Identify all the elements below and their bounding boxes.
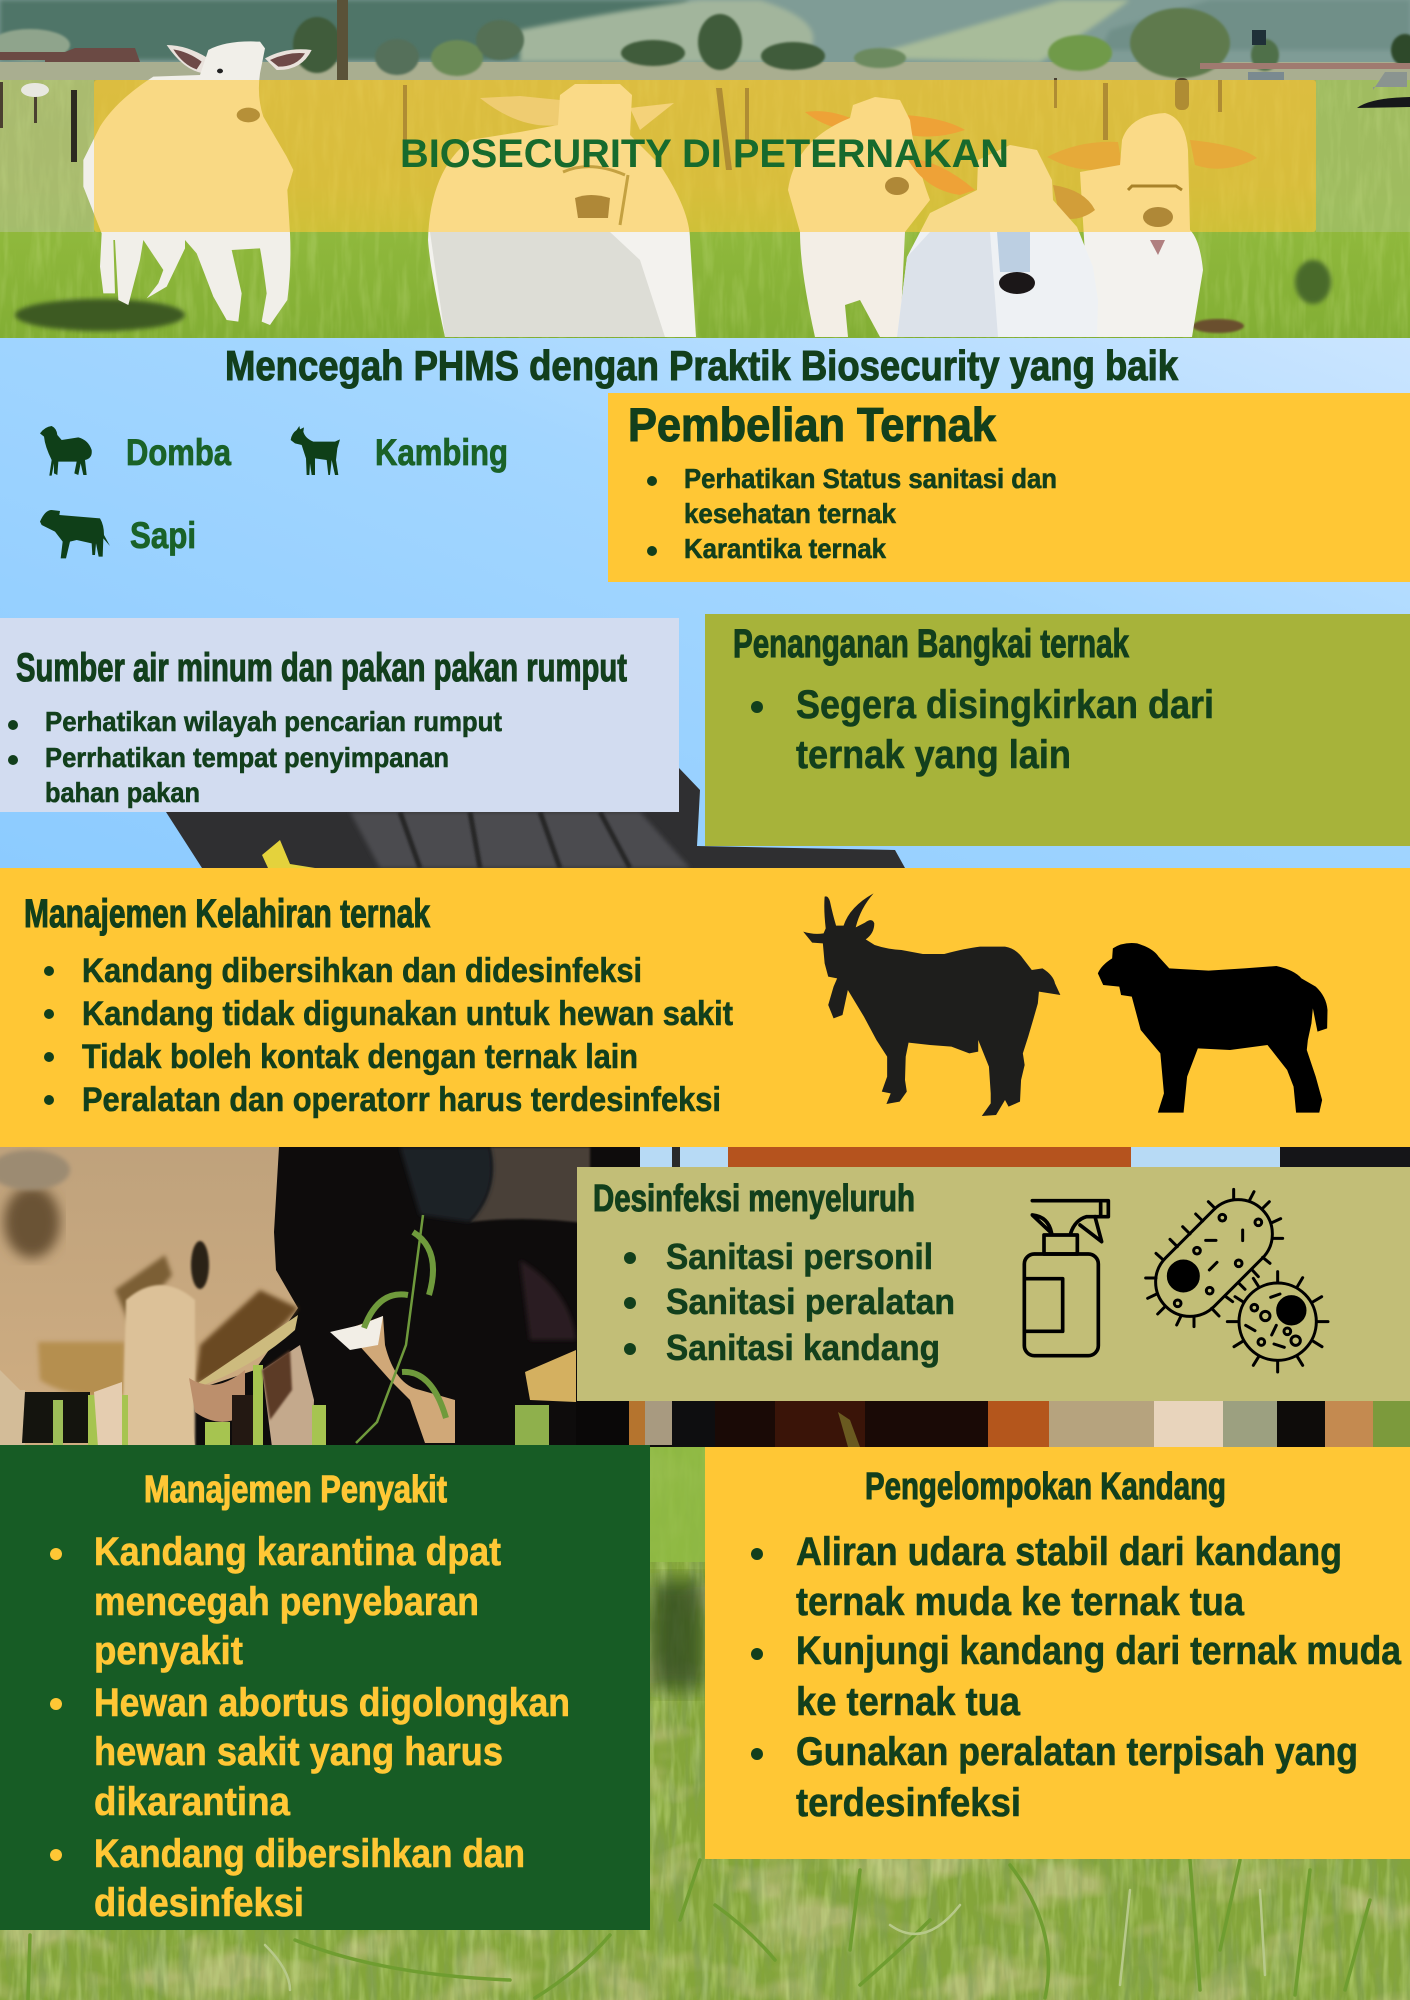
white patch on black cow <box>345 1316 455 1443</box>
background: hero photo of white cattle on pasture <box>0 0 1410 338</box>
list: Manajemen Penyakit: Kandang dibersihkan dan <box>94 1832 525 1876</box>
heading: Pengelompokan Kandang: Pengelompokan Kandang <box>865 1466 1226 1508</box>
list: Manajemen Penyakit: didesinfeksi <box>94 1881 304 1925</box>
list: Sumber air minum: Perhatikan wilayah pencarian rumput <box>45 706 502 737</box>
list: Pengelompokan Kandang: Aliran udara stabil dari kandang <box>796 1530 1342 1574</box>
background: grass photo <box>0 1447 1410 2000</box>
list: Manajemen Kelahiran ternak: Peralatan dan operatorr harus terdesinfeksi <box>82 1081 721 1119</box>
panel: Pembelian Ternak <box>608 393 1410 582</box>
list: Desinfeksi menyeluruh: Sanitasi kandang <box>666 1327 940 1368</box>
panel: Penanganan Bangkai ternak <box>705 614 1410 846</box>
plant <box>356 1215 446 1443</box>
tan cow <box>0 1147 298 1447</box>
heading: Penanganan Bangkai ternak: Penanganan Bangkai ternak <box>733 622 1130 666</box>
heading: Pembelian Ternak: Pembelian Ternak <box>628 398 997 451</box>
list: Manajemen Penyakit <box>50 1530 570 1925</box>
icon: spray bottle <box>1024 1201 1108 1356</box>
list: Penanganan Bangkai ternak <box>751 683 1214 777</box>
label: Domba: Domba <box>126 432 231 473</box>
list: Desinfeksi menyeluruh <box>624 1236 955 1368</box>
title banner <box>94 80 1316 232</box>
label: Sapi: Sapi <box>130 515 196 556</box>
icon: sheep small <box>40 426 92 476</box>
panel: Manajemen Kelahiran ternak <box>0 868 1410 1147</box>
herd legs below disinfection panel <box>576 1401 629 1447</box>
list: Manajemen Kelahiran ternak: Kandang dibersihkan dan didesinfeksi <box>82 952 642 990</box>
list: Manajemen Kelahiran ternak <box>44 952 733 1119</box>
cow right <box>1047 113 1257 337</box>
list: Pembelian Ternak <box>647 463 1057 564</box>
heading: Manajemen Penyakit: Manajemen Penyakit <box>144 1469 447 1511</box>
cow far left <box>83 41 312 325</box>
list: Desinfeksi menyeluruh: Sanitasi peralatan <box>666 1281 955 1322</box>
heading: subtitle: Mencegah PHMS dengan Praktik Biosecurity yang baik <box>225 342 1179 389</box>
list: Sumber air minum: Perrhatikan tempat penyimpanan <box>45 742 449 773</box>
icon: goat silhouette <box>803 893 1060 1116</box>
list: Pengelompokan Kandang <box>751 1530 1402 1825</box>
panel: Manajemen Penyakit <box>0 1445 650 1930</box>
list: Desinfeksi menyeluruh: Sanitasi personil <box>666 1236 933 1277</box>
panel: Sumber air minum <box>0 618 679 812</box>
cow front <box>897 145 1098 337</box>
list: Manajemen Penyakit: hewan sakit yang harus <box>94 1730 503 1774</box>
list: Manajemen Kelahiran ternak: Tidak boleh kontak dengan ternak lain <box>82 1038 638 1076</box>
cow center-left <box>428 84 696 337</box>
title: BIOSECURITY DI PETERNAKAN <box>400 132 1009 176</box>
list: Sumber air minum <box>8 706 502 808</box>
list: Manajemen Kelahiran ternak: Kandang tidak digunakan untuk hewan sakit <box>82 995 733 1033</box>
list: Pengelompokan Kandang: terdesinfeksi <box>796 1781 1021 1825</box>
list: Pengelompokan Kandang: ke ternak tua <box>796 1680 1021 1724</box>
black cow muzzle <box>470 1147 590 1224</box>
panel: Desinfeksi menyeluruh <box>577 1167 1410 1401</box>
icon: cow small <box>40 510 110 558</box>
icon: goat small <box>291 426 340 475</box>
background: blue sky section <box>0 338 1410 868</box>
legend: livestock types <box>40 426 508 558</box>
panel: Pengelompokan Kandang <box>705 1447 1410 1859</box>
icon: bacteria <box>1141 1185 1328 1372</box>
icon: sheep silhouette <box>1098 943 1327 1113</box>
label: Kambing: Kambing <box>375 432 508 473</box>
list: Penanganan Bangkai ternak: Segera disingkirkan dari <box>796 683 1214 727</box>
heading: Sumber air minum: Sumber air minum dan pakan pakan rumput <box>16 646 627 690</box>
list: Pengelompokan Kandang: Gunakan peralatan terpisah yang <box>796 1730 1358 1774</box>
list: Pembelian Ternak: Perhatikan Status sanitasi dan <box>684 463 1057 494</box>
list: Manajemen Penyakit: mencegah penyebaran <box>94 1580 479 1624</box>
background: black cow in sky <box>166 768 905 868</box>
list: Penanganan Bangkai ternak: ternak yang lain <box>796 733 1071 777</box>
list: Manajemen Penyakit: penyakit <box>94 1629 243 1673</box>
list: Pengelompokan Kandang: ternak muda ke ternak tua <box>796 1580 1245 1624</box>
background: cattle close-up photo <box>0 1147 1410 1447</box>
list: Manajemen Penyakit: dikarantina <box>94 1780 291 1824</box>
list: Manajemen Penyakit: Hewan abortus digolongkan <box>94 1681 570 1725</box>
cow center-back <box>788 97 965 337</box>
heading: Desinfeksi menyeluruh: Desinfeksi menyeluruh <box>593 1178 915 1220</box>
list: Sumber air minum: bahan pakan <box>45 777 200 808</box>
list: Pembelian Ternak: Karantika ternak <box>684 533 886 564</box>
list: Pembelian Ternak: kesehatan ternak <box>684 498 896 529</box>
list: Manajemen Penyakit: Kandang karantina dpat <box>94 1530 501 1574</box>
heading: Manajemen Kelahiran ternak: Manajemen Kelahiran ternak <box>24 892 431 936</box>
